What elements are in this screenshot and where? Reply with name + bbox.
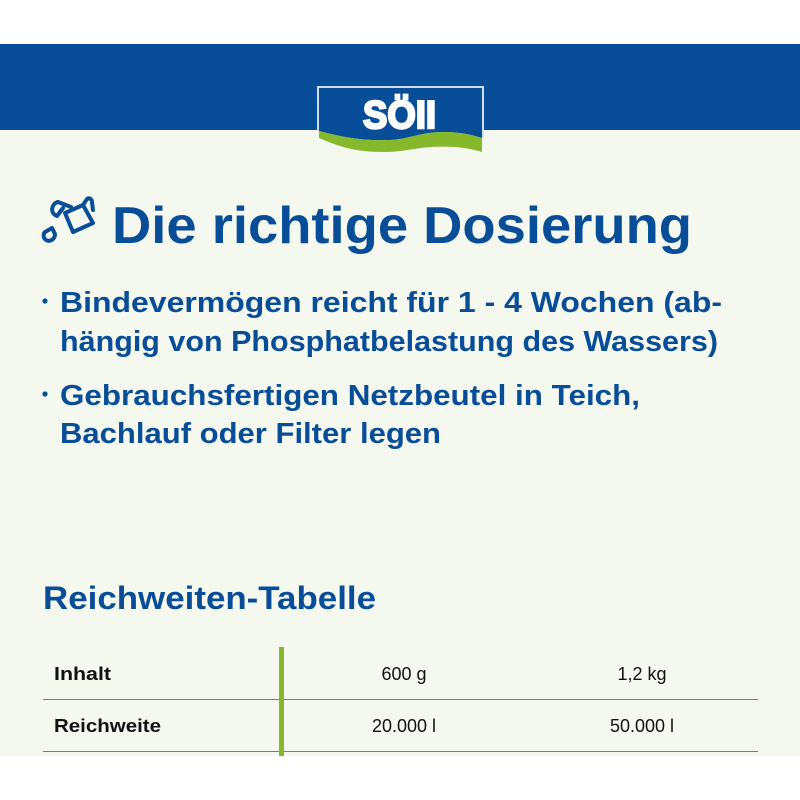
row: Reichweite: 50.000 l [610,716,674,736]
bullet 1: hängig von Phosphatbelastung des Wassers) [60,326,718,358]
table [43,647,758,756]
title: Die richtige Dosierung [112,197,692,255]
row: Reichweite: 20.000 l [372,716,436,736]
logo: Söll [318,87,483,152]
bullet list [42,287,722,450]
row: Inhalt: 1,2 kg [617,664,667,684]
bullet 1: Bindevermögen reicht für 1 - 4 Wochen (ab- [60,287,722,319]
row: Reichweite: Reichweite [54,716,161,736]
bullet 1 [42,287,722,358]
bullet 2 [42,380,640,450]
row: Inhalt: Inhalt [54,664,111,684]
bullet 2: Bachlauf oder Filter legen [60,418,441,450]
row: Reichweite [54,716,674,736]
row: Inhalt [54,664,667,684]
icon: measuring cup pouring [44,198,93,241]
logo: Söll: SÖII [363,94,436,137]
row: Inhalt: 600 g [381,664,427,684]
bullet 2: Gebrauchsfertigen Netzbeutel in Teich, [60,380,640,412]
table heading: Reichweiten-Tabelle [43,580,376,616]
header band [0,44,800,130]
